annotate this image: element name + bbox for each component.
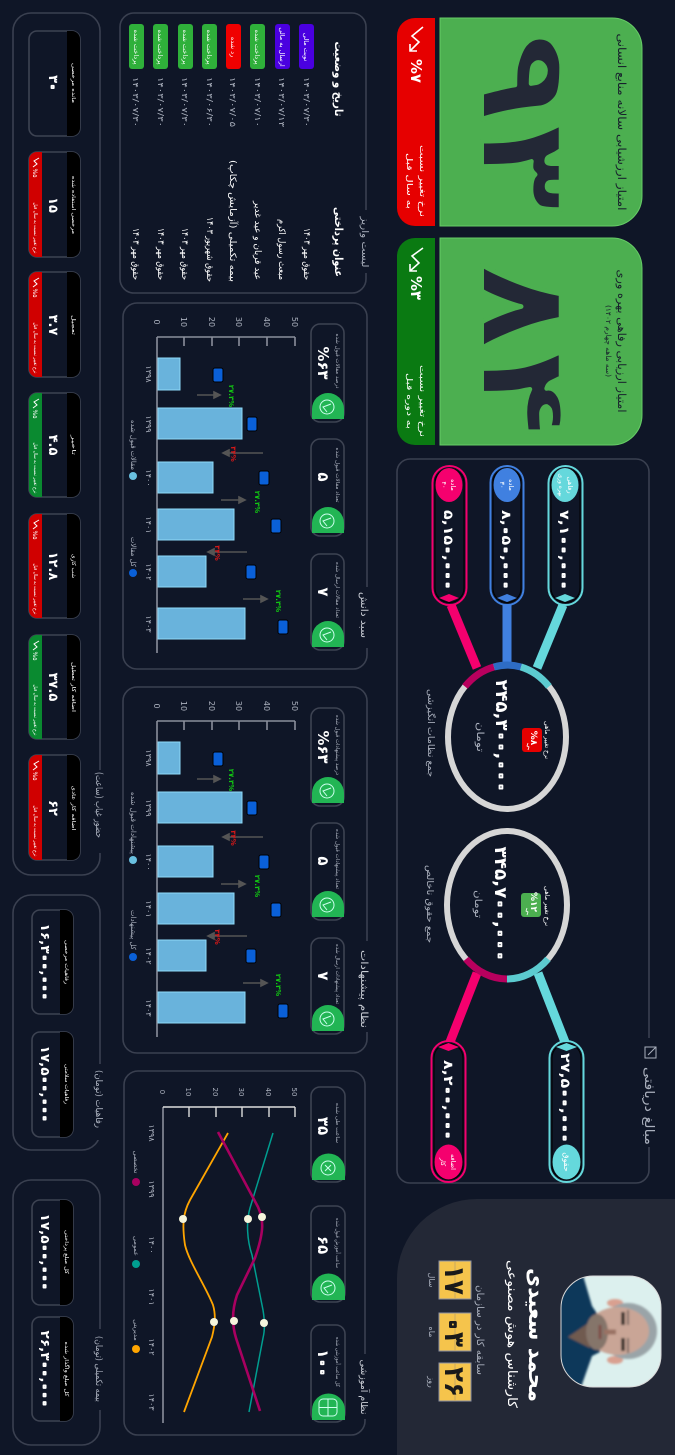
tenure: days: [427, 1363, 471, 1401]
stat: leave remaining: مانده مرخصی: [70, 63, 76, 103]
bar chart: articles: ۱۳۹۹: [144, 415, 153, 433]
tag: yearly change red: [397, 18, 435, 226]
donut: total gross salary: ۳۴۵,۷ ۰۰ , ۰۰۰: [490, 847, 510, 961]
stat: total paid: کل مبلغ پرداختی: [63, 1230, 70, 1274]
bar chart: articles: ۱۴۰۰: [144, 469, 153, 487]
stat: holiday overtime: %۵: [31, 652, 38, 660]
stat card: hours passed: [311, 1087, 345, 1182]
pill: salary: ۲۷,۵ ۰۰ , ۰۰۰: [557, 1053, 572, 1143]
stat: holiday overtime: نرخ تغییر نسبت به سال قبل: [32, 684, 38, 736]
badge: green change: [521, 892, 541, 917]
stat: leave used: نرخ تغییر نسبت به سال قبل: [32, 202, 38, 254]
bar chart: suggestions: 20: [207, 701, 216, 711]
stat card: submitted count: ۷: [314, 587, 332, 597]
payment row 5: پرداخت شده: [205, 30, 213, 65]
legend: training: عمومی: [132, 1236, 140, 1256]
panel heading: لیست واریز: [359, 215, 370, 268]
panel: knowledge basket: [123, 303, 372, 669]
stat: leave welfare: [32, 910, 73, 1014]
label: total gross salary: جمع حقوق ناخالص: [424, 865, 434, 943]
bar chart: articles: 30: [234, 317, 243, 327]
donut: total gross salary: تومان: [472, 890, 483, 918]
payment row 8: [129, 24, 144, 280]
stat: health welfare: رفاهیات سلامتی: [63, 1064, 69, 1104]
legend: training: [132, 1151, 140, 1353]
panel heading: مبالغ دریافتی: [641, 1067, 656, 1145]
tag: yearly change red: نرخ تغییر نسبت: [418, 145, 427, 217]
donut: total incentive systems: [448, 665, 566, 809]
stat card: acceptance percent: درصد مقالات قبول شده: [334, 334, 340, 389]
stat: delay: [29, 393, 80, 497]
pill: article 30: [490, 466, 524, 605]
payment row 3: [250, 24, 265, 280]
column heading: date and status: تاریخ و وضعیت: [332, 42, 345, 116]
stat card: submitted count: تعداد پیشنهادات ارسال شده: [334, 944, 340, 1004]
bar chart: articles: ۲۷.۳%: [274, 590, 282, 612]
stat: total assigned: [32, 1317, 73, 1421]
stat: leave used: [29, 152, 80, 257]
label: total incentive systems: جمع نظامات انگیزشی: [425, 689, 437, 777]
legend: articles: مقالات قبول شده: [129, 420, 137, 470]
tag: period change green: [397, 238, 435, 445]
stat: regular overtime: [29, 755, 80, 860]
stat card: total hours: کل ساعت آموزشی شده: [334, 1337, 341, 1387]
tag: yearly change red: %۷: [407, 59, 425, 83]
line chart: training hours: 20: [211, 1088, 219, 1096]
payment row 7: حقوق مهر ۱۴۰۳: [155, 228, 165, 280]
bar chart: articles: ۳۴%: [213, 545, 221, 561]
badge: green change: %۱۲: [528, 892, 538, 913]
payment row 1: حقوق مهر ۱۴۰۳: [301, 228, 311, 280]
bar chart: articles: 40: [262, 317, 271, 327]
panel heading: رفاهیات (تومان): [93, 1070, 103, 1128]
pill: salary: [550, 1041, 584, 1182]
stat: early leave: ۳.۷: [45, 315, 60, 335]
tenure: years: [427, 1261, 471, 1299]
bar chart: articles: 0: [152, 319, 161, 325]
legend: articles: کل مقالات: [129, 537, 137, 568]
stat: total paid: [32, 1200, 73, 1305]
pill: welfare productivity: [548, 466, 582, 605]
stat: night shift: نرخ تغییر نسبت به سال قبل: [32, 564, 38, 614]
pill: article 40: [432, 466, 466, 605]
legend: suggestions: کل پیشنهادات: [129, 910, 137, 951]
stat: regular overtime: اضافه کار عادی: [70, 786, 77, 831]
pill: article 40: ماده: [449, 479, 457, 491]
card subtitle: (سه ماهه چهارم ۱۴۰۲): [604, 305, 612, 377]
stat card: acceptance percent: %۶۳: [314, 730, 332, 764]
tenure: months: [427, 1313, 471, 1351]
tag: yearly change red: به سال قبل: [405, 153, 414, 209]
card title: امتیاز ارزیابی رفاهی بهره وری: [615, 270, 628, 412]
pill: welfare productivity: ۷,۱ ۰۰ , ۰۰۰: [556, 510, 571, 590]
badge: red change: [522, 728, 542, 752]
tag: period change green: %۳: [407, 276, 425, 300]
line chart: training hours: ۱۴۰۰: [147, 1236, 156, 1254]
stat card: submitted count: [311, 938, 344, 1034]
stat card: total hours: [311, 1325, 345, 1422]
bar chart: articles: 20: [207, 317, 216, 327]
tenure: months: ماه: [427, 1327, 436, 1337]
bar chart: suggestions: 40: [262, 701, 271, 711]
stat: regular overtime: %۵: [31, 772, 38, 780]
bar chart: suggestions: ۱۴۰۰: [144, 853, 153, 871]
payment row 1: ۱۴۰۳/۰۷/۳۰: [302, 77, 311, 127]
job title: کارشناس هوش مصنوعی: [504, 1260, 519, 1409]
pill: article 40: ۴۰: [440, 482, 448, 488]
stat: holiday overtime: [29, 635, 80, 739]
stat card: acceptance percent: %۶۳: [314, 346, 332, 380]
stat: total paid: ۱۷,۵ ۰۰ , ۰۰۰: [38, 1214, 53, 1290]
legend: suggestions: [129, 792, 137, 961]
payment row 1: نوبت مالی: [302, 33, 310, 61]
bar chart: suggestions: 10: [179, 701, 188, 711]
stat: leave used: ۱۵: [45, 197, 60, 213]
bar chart: articles: ۲۷.۳%: [227, 385, 235, 407]
panel: received amounts: [397, 459, 656, 1183]
stat card: acceptance percent: درصد پیشنهادات قبول شده: [334, 715, 340, 776]
pill: article 30: ماده: [507, 479, 515, 491]
stat card: acceptance percent: [311, 324, 344, 422]
line chart: training hours: ۱۴۰۳: [147, 1393, 156, 1411]
stat: delay: %۵: [31, 410, 38, 418]
stat card: acceptance percent: [311, 708, 344, 806]
tenure: days: روز: [427, 1375, 436, 1388]
pill: welfare productivity: بهره وری: [557, 473, 564, 497]
column heading: title: عنوان پرداختی: [332, 207, 345, 277]
stat: holiday overtime: ۳۷.۵: [45, 673, 60, 701]
employee name: محمد سعیدی: [523, 1268, 548, 1402]
payment row 7: ۱۴۰۳/۰۷/۳۰: [156, 77, 165, 127]
stat: health welfare: [32, 1032, 73, 1137]
bar chart: articles: ۱۴۰۱: [144, 516, 153, 534]
donut: total incentive systems: تومان: [474, 722, 485, 752]
icon: share: [645, 1047, 656, 1058]
tenure: days: ۲۶: [438, 1367, 471, 1397]
panel: employee profile: [397, 1199, 675, 1455]
panel heading: سبد دانش: [358, 592, 369, 638]
big score: ۹۳: [452, 32, 596, 212]
stat: regular overtime: ۶۲: [45, 800, 60, 816]
stat card: submitted count: تعداد مقالات ارسال شده: [334, 562, 340, 618]
stat: early leave: نرخ تغییر نسبت به سال قبل: [32, 322, 38, 374]
badge: red change: %۸: [528, 731, 538, 746]
payment row 6: پرداخت شده: [181, 30, 189, 65]
payment row 3: عید قربان و عید غدیر: [252, 200, 262, 280]
legend: articles: [129, 420, 137, 577]
legend: training: مدیریتی: [132, 1319, 140, 1341]
bar chart: articles: ۱۳۹۸: [144, 365, 153, 383]
stat: early leave: [29, 272, 80, 377]
tenure heading: سابقه کار در سازمان: [474, 1285, 485, 1375]
pill: overtime: کار: [439, 1157, 447, 1167]
pill: article 30: ۳۰: [498, 482, 506, 488]
photo: [558, 1272, 661, 1390]
payment row 6: حقوق مهر ۱۴۰۳: [179, 228, 189, 280]
stat card: hours passed: ساعت طی شده: [334, 1103, 340, 1143]
payment row 4: رد شده: [229, 37, 237, 57]
bar chart: articles: ۱۴۰۲: [144, 563, 153, 581]
line chart: training hours: 30: [237, 1088, 245, 1096]
payment row 5: [202, 24, 217, 282]
tag: period change green: به دوره قبل: [405, 373, 414, 429]
bar chart: suggestions: ۱۴۰۳: [144, 999, 153, 1017]
bar chart: articles: ۲۷.۳%: [253, 491, 261, 513]
payment row 3: پرداخت شده: [253, 30, 261, 65]
big score: ۸۴: [452, 263, 596, 437]
bar chart: suggestions: 0: [152, 703, 161, 709]
panel: welfare productivity score: [440, 238, 642, 445]
payment row 2: ارسال به مالی: [278, 27, 286, 67]
line chart: training hours: 50: [290, 1088, 298, 1096]
stat card: accepted count: ۵: [314, 472, 332, 482]
bar chart: articles: [144, 317, 299, 653]
panel heading: نظام آموزشی: [358, 1360, 371, 1414]
bar chart: articles: 50: [290, 317, 299, 327]
stat card: hours passed: ۳۵: [314, 1117, 332, 1135]
payment row 8: پرداخت شده: [132, 30, 140, 65]
stat card: accepted count: [311, 439, 344, 536]
bar chart: suggestions: ۳۴%: [229, 830, 237, 846]
bar chart: suggestions: ۱۴۰۲: [144, 947, 153, 965]
payment row 6: ۱۴۰۳/۰۷/۳۰: [180, 77, 189, 127]
panel: attendance: [13, 13, 105, 875]
stat: leave welfare: رفاهیات مرخصی: [63, 940, 69, 984]
line chart: training hours: ۱۳۹۸: [147, 1124, 156, 1142]
payment row 5: ۱۴۰۳/۰۶/۳۰: [205, 77, 214, 127]
payment row 1: [299, 24, 314, 280]
panel: training system: [124, 1071, 371, 1435]
line chart: training hours: 40: [264, 1088, 272, 1096]
payment row 4: بیمه تکمیلی (آزمایش چکاپ): [227, 160, 239, 282]
tenure: years: سال: [427, 1273, 436, 1288]
bar chart: suggestions: ۲۷.۳%: [274, 974, 282, 996]
stat: delay: ۴.۵: [45, 435, 60, 455]
bar chart: articles: 10: [179, 317, 188, 327]
panel heading: حضور غیاب (ساعت): [93, 772, 104, 838]
line chart: training hours: ۱۴۰۱: [147, 1288, 156, 1306]
line chart: training hours: 0: [158, 1090, 166, 1094]
line chart: training hours: ۱۴۰۲: [147, 1338, 156, 1356]
payment row 7: [153, 24, 168, 280]
card title: امتیاز ارزشیابی سالانه منابع انسانی: [615, 34, 628, 210]
line chart: training hours: [147, 1088, 298, 1423]
stat: holiday overtime: اضافه کار تعطیل: [70, 662, 77, 713]
pill: overtime: ۸,۲ ۰۰ , ۰۰۰: [440, 1060, 455, 1140]
bar chart: suggestions: 50: [290, 701, 299, 711]
pill: salary: حقوق: [562, 1152, 571, 1172]
stat: total assigned: ۲۶,۳ ۰۰ , ۰۰۰: [38, 1330, 53, 1408]
payment row 7: پرداخت شده: [156, 30, 164, 65]
payment row 3: ۱۴۰۳/۰۷/۱۰: [253, 77, 262, 127]
bar chart: suggestions: 30: [234, 701, 243, 711]
stat card: total hours: ۱ ۰۰: [314, 1349, 332, 1377]
payment row 5: حقوق شهریور ۱۴۰۳: [204, 217, 214, 282]
bar chart: suggestions: ۲۷.۳%: [253, 875, 261, 897]
stat card: accepted count: ۵: [314, 856, 332, 866]
payment row 2: مبعث رسول اکرم: [276, 219, 286, 280]
donut: total gross salary: [447, 831, 567, 979]
stat: leave welfare: ۱۶,۳ ۰۰ , ۰۰۰: [38, 924, 53, 1000]
stat: leave remaining: ۳ ۰: [45, 75, 60, 91]
bar chart: suggestions: ۱۴۰۱: [144, 900, 153, 918]
stat: leave used: %۵: [31, 169, 38, 177]
panel heading: بیمه تکمیلی (تومان): [93, 1336, 103, 1402]
payment row 8: ۱۴۰۳/۰۷/۳۰: [131, 77, 140, 127]
line chart: training hours: 10: [184, 1088, 192, 1096]
stat card: submitted count: ۷: [314, 971, 332, 981]
stat: night shift: [29, 514, 80, 618]
panel: suggestions system: [123, 687, 372, 1053]
panel heading: نظام پیشنهادات: [358, 950, 369, 1028]
payment row 2: [275, 24, 290, 280]
line chart: training hours: ۱۳۹۹: [147, 1180, 156, 1198]
bar chart: suggestions: [144, 701, 299, 1037]
bar chart: suggestions: ۳۴%: [213, 929, 221, 945]
panel: payment list: [120, 13, 371, 293]
bar chart: suggestions: ۱۳۹۸: [144, 749, 153, 767]
stat: delay: تاخیر: [70, 433, 76, 456]
payment row 4: ۱۴۰۳/۰۷/۰۵: [228, 77, 237, 127]
bar chart: articles: ۱۴۰۳: [144, 615, 153, 633]
pill: welfare productivity: رفاهی: [566, 476, 574, 494]
bar chart: articles: ۳۴%: [229, 446, 237, 462]
legend: training: تخصصی: [132, 1151, 140, 1174]
stat: night shift: شب کاری: [70, 554, 77, 578]
stat card: accepted count: تعداد مقالات قبول شده: [334, 448, 340, 503]
stat card: submitted count: [311, 554, 344, 650]
stat card: accepted count: تعداد پیشنهادات قبول شده: [334, 829, 340, 889]
panel: annual HR evaluation score: [440, 18, 642, 226]
pill: overtime: اضافه: [449, 1154, 457, 1170]
stat: early leave: تعجیل: [70, 315, 76, 336]
donut: total incentive systems: نرخ تغییر ماهی: [543, 721, 551, 759]
panel: supplementary insurance: [13, 1180, 105, 1445]
payment row 2: ۱۴۰۳/۰۷/۱۳: [277, 77, 286, 128]
stat: early leave: %۵: [31, 289, 38, 297]
stat: regular overtime: نرخ تغییر نسبت به سال قبل: [32, 806, 38, 856]
stat card: hours accepted: ۶۵: [314, 1236, 332, 1254]
connector lines: [450, 605, 565, 1042]
tag: period change green: نرخ تغییر نسبت: [418, 365, 427, 437]
pill: overtime: [432, 1041, 466, 1182]
payment row 4: [226, 24, 241, 282]
stat: leave used: مرخصی استفاده شده: [70, 176, 76, 234]
stat: night shift: %۵: [31, 531, 38, 539]
stat card: accepted count: [311, 823, 344, 920]
tenure: years: ۱۷: [438, 1265, 471, 1295]
stat: delay: نرخ تغییر نسبت به سال قبل: [32, 442, 38, 494]
stat: total assigned: کل مبلغ واگذار شده: [63, 1341, 70, 1397]
bar chart: suggestions: ۲۷.۳%: [227, 769, 235, 791]
stat: night shift: ۱۲.۸: [45, 552, 60, 580]
stat: leave remaining: [29, 31, 80, 136]
pill: article 40: ۵,۱۵ ۰ , ۰۰۰: [440, 510, 455, 590]
tenure: months: ۰۳: [438, 1317, 471, 1347]
payment row 8: حقوق مهر ۱۴۰۳: [130, 228, 140, 280]
panel: welfare benefits: [13, 895, 105, 1150]
legend: suggestions: پیشنهادات قبول شده: [129, 792, 137, 854]
donut: total incentive systems: ۲۴۵,۳ ۰۰ , ۰۰۰: [491, 680, 511, 792]
stat card: hours accepted: ساعت آموزش قبول شده: [334, 1218, 341, 1268]
pill: article 30: ۸, ۰ ۵ ۰ , ۰۰۰: [498, 510, 513, 590]
stat: health welfare: ۱۷,۵ ۰۰ , ۰۰۰: [38, 1046, 53, 1122]
stat card: hours accepted: [311, 1206, 345, 1302]
payment row 6: [178, 24, 193, 280]
donut: total gross salary: نرخ تغییر ماهی: [543, 886, 551, 926]
bar chart: suggestions: ۱۳۹۹: [144, 799, 153, 817]
